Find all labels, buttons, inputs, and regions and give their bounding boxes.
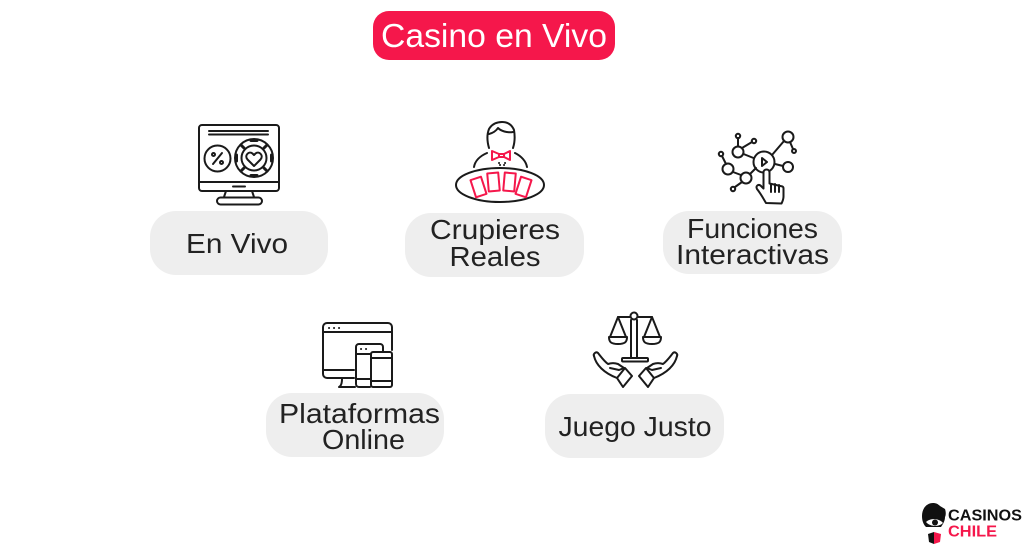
icon: monitor with casino chip [199, 125, 279, 204]
panel: juego justo [545, 312, 724, 458]
panel: en vivo [150, 125, 328, 275]
panel: funciones interactivas: Interactivas [676, 239, 829, 270]
panel: funciones interactivas: Funciones [687, 213, 818, 244]
panel: juego justo: Juego Justo [558, 411, 712, 442]
icon: turban with eye [922, 503, 946, 544]
icon: dealer at card table [456, 122, 544, 202]
panel: crupieres reales: Crupieres [430, 214, 560, 245]
logo: casinos chile: CHILE [948, 524, 997, 540]
logo: casinos chile [922, 503, 1022, 544]
panel: crupieres reales: Reales [450, 241, 540, 272]
panel: plataformas online: Plataformas [279, 398, 440, 429]
icon: desktop, tablet and phone [323, 323, 392, 387]
panel: plataformas online [266, 323, 444, 457]
title [373, 11, 615, 60]
panel: funciones interactivas [663, 132, 842, 274]
panel: en vivo: En Vivo [186, 228, 288, 259]
panel: plataformas online: Online [322, 424, 405, 455]
icon: interactive network with hand [719, 132, 796, 204]
panel: crupieres reales [405, 122, 584, 277]
icon: scales and hands [594, 312, 677, 387]
title: Casino en Vivo [381, 17, 607, 54]
logo: casinos chile: CASINOS [948, 508, 1022, 524]
